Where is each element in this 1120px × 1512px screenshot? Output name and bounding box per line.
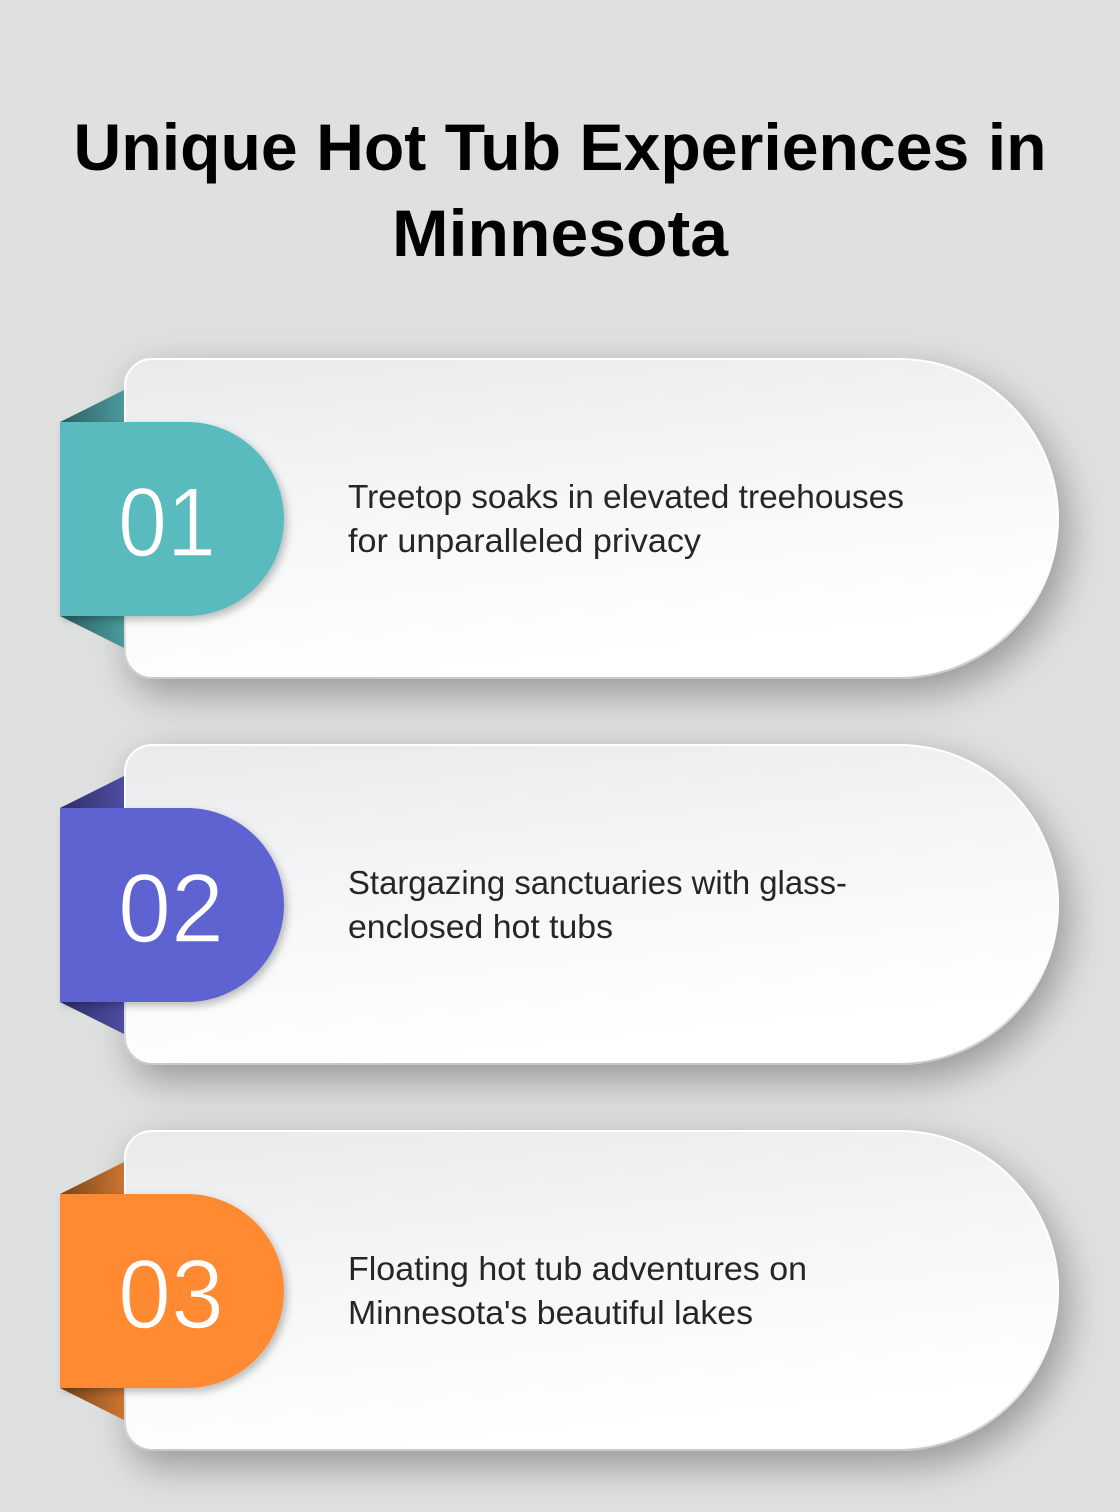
text 02: enclosed hot tubs bbox=[348, 908, 613, 945]
title: Unique Hot Tub Experiences in bbox=[74, 110, 1046, 184]
number badge 03 bbox=[60, 1194, 284, 1388]
text 02 bbox=[348, 864, 847, 945]
text 01: Treetop soaks in elevated treehouses bbox=[348, 478, 904, 515]
number badge 02 bbox=[60, 808, 284, 1002]
ribbon folds 03 bbox=[60, 1162, 124, 1420]
title bbox=[74, 110, 1046, 270]
ribbon folds 02 bbox=[60, 776, 124, 1034]
text 03: Minnesota's beautiful lakes bbox=[348, 1294, 753, 1331]
number 02: 02 bbox=[118, 853, 224, 963]
card 03 bbox=[125, 1131, 1058, 1450]
number 01: 01 bbox=[118, 467, 216, 577]
panel: step 02 bbox=[60, 745, 1058, 1064]
panel: step 03 bbox=[60, 1131, 1058, 1450]
number 03: 03 bbox=[118, 1239, 224, 1349]
text 01 bbox=[348, 478, 904, 559]
text 03 bbox=[348, 1250, 807, 1331]
text 03: Floating hot tub adventures on bbox=[348, 1250, 807, 1287]
text 01: for unparalleled privacy bbox=[348, 522, 702, 559]
number badge 01 bbox=[60, 422, 284, 616]
text 02: Stargazing sanctuaries with glass- bbox=[348, 864, 847, 901]
card 02 bbox=[125, 745, 1058, 1064]
card 01 bbox=[125, 359, 1058, 678]
title: Minnesota bbox=[392, 196, 729, 270]
panel: step 01 bbox=[60, 359, 1058, 678]
ribbon folds 01 bbox=[60, 390, 124, 648]
